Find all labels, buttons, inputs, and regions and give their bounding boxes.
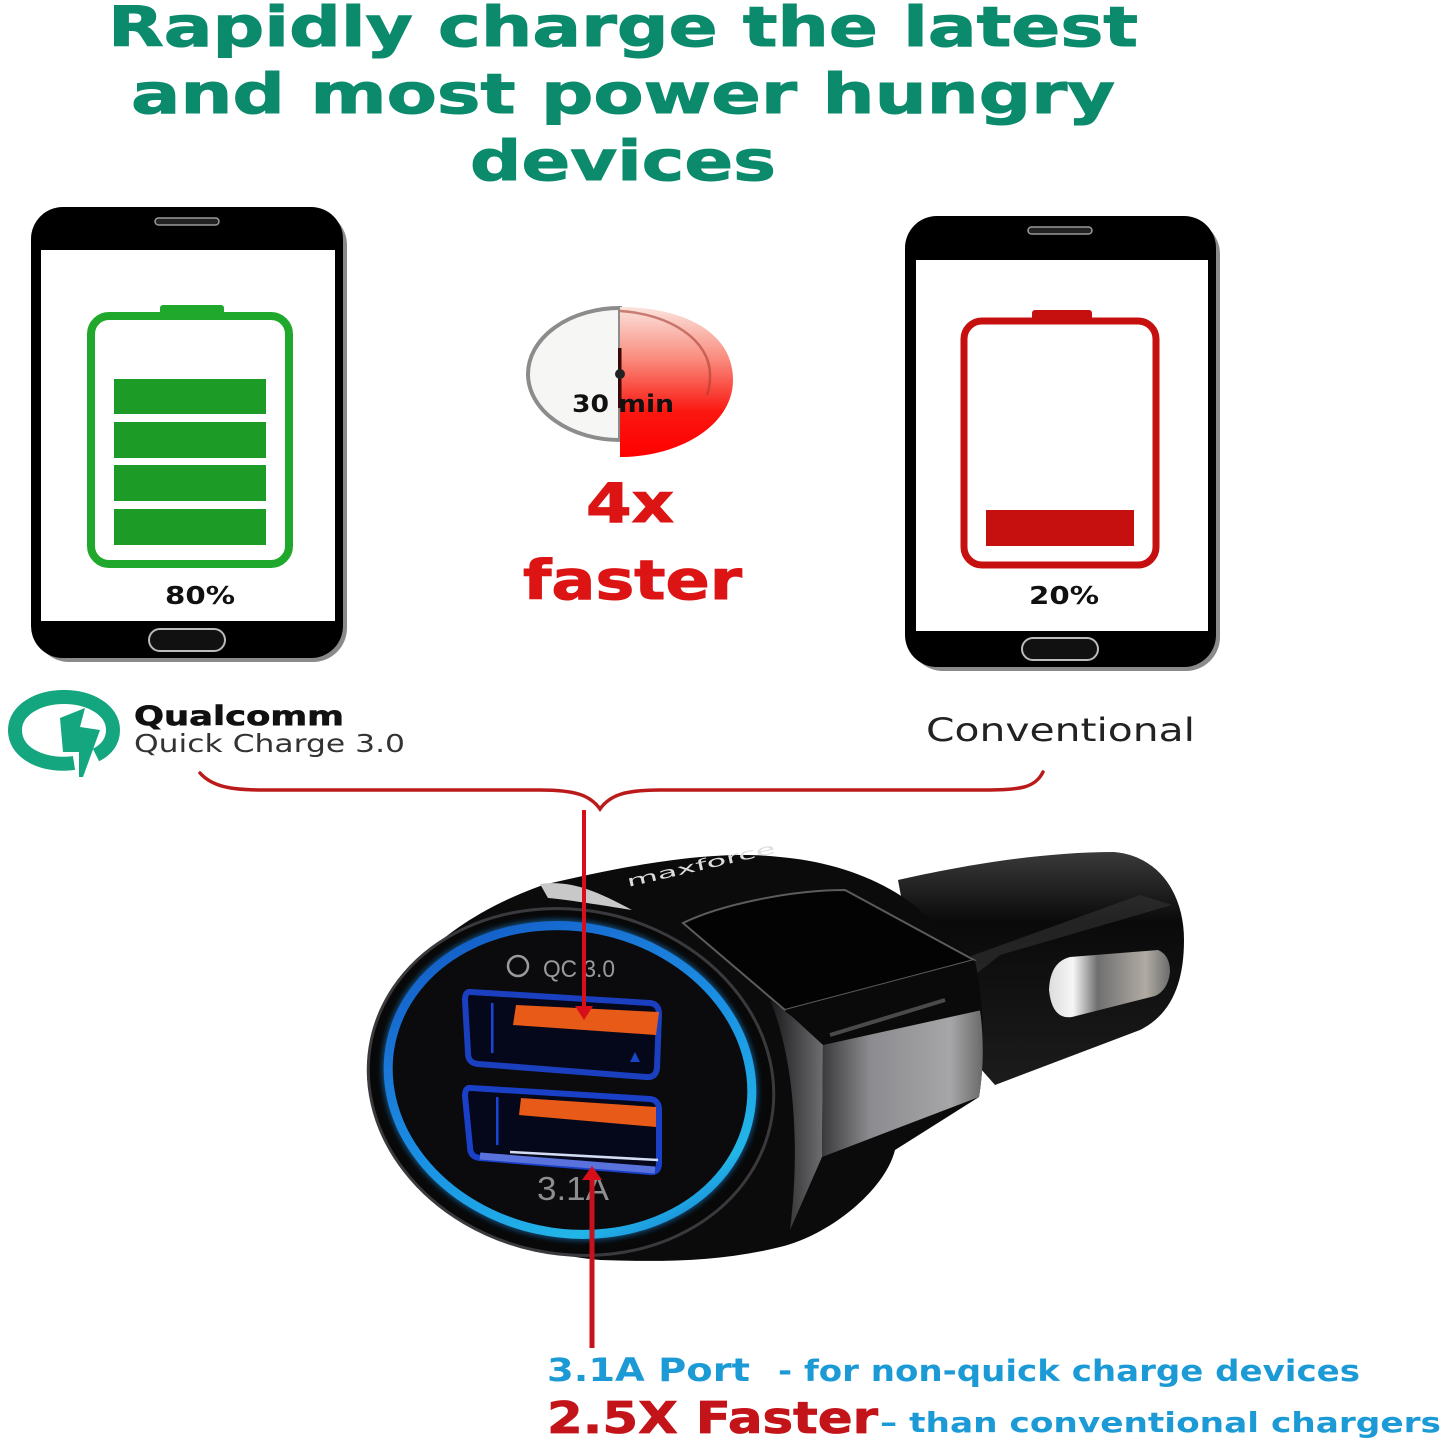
title: devices	[470, 129, 776, 193]
USB port 1	[465, 992, 659, 1077]
callout: 4x faster	[523, 472, 742, 612]
callout: 4x faster: 4x	[586, 472, 674, 535]
arrow: to quick charge port	[575, 810, 593, 1020]
QC 3.0 label: QC 3.0	[543, 956, 615, 983]
text: 2.5X faster note	[547, 1393, 1441, 1444]
light ring	[359, 892, 781, 1268]
text: 3.1A port note: - for non-quick charge devices	[778, 1354, 1360, 1388]
black raised panel	[683, 890, 974, 1010]
text: 3.1A port note	[547, 1351, 1360, 1389]
callout: 4x faster: faster	[523, 549, 742, 612]
label: 20%: 20%	[1029, 581, 1099, 610]
top highlight	[540, 883, 632, 910]
title	[108, 0, 1138, 193]
logo: Qualcomm Quick Charge 3.0: Quick Charge 3.0	[134, 729, 405, 758]
silver collar edge	[785, 960, 982, 1045]
QC 3.0 label	[508, 956, 615, 983]
silver collar band	[822, 985, 983, 1157]
car charger	[336, 839, 1184, 1293]
icon: red battery 20%	[964, 310, 1156, 565]
main housing	[368, 855, 983, 1261]
brand text: maxforce	[625, 839, 777, 891]
arrow: to 3.1A port	[582, 1166, 602, 1348]
collar bevel	[770, 1000, 823, 1230]
icon: green battery 80%	[91, 305, 289, 564]
bracket	[200, 772, 1043, 809]
label: 30 min: 30 min	[572, 390, 674, 418]
plug body	[898, 852, 1184, 1085]
text: 2.5X faster note: 2.5X Faster	[547, 1393, 878, 1444]
title: and most power hungry	[131, 62, 1115, 126]
USB port 2	[465, 1088, 659, 1172]
label: 3.1A: 3.1A	[537, 1170, 609, 1207]
logo: Qualcomm Quick Charge 3.0: Qualcomm	[134, 701, 344, 732]
metal contact	[1049, 950, 1170, 1017]
text: 2.5X faster note: – than conventional chargers	[880, 1406, 1441, 1439]
text: 3.1A port note: 3.1A Port	[547, 1351, 750, 1389]
label: Conventional: Conventional	[926, 711, 1195, 749]
phone: conventional	[905, 216, 1220, 671]
logo: Qualcomm Quick Charge 3.0	[15, 697, 405, 777]
label: 80%: 80%	[165, 581, 235, 610]
face	[336, 871, 806, 1293]
icon: 30 min timer	[528, 307, 733, 457]
phone: Qualcomm quick charge	[31, 207, 347, 662]
light ring glow	[359, 892, 781, 1268]
